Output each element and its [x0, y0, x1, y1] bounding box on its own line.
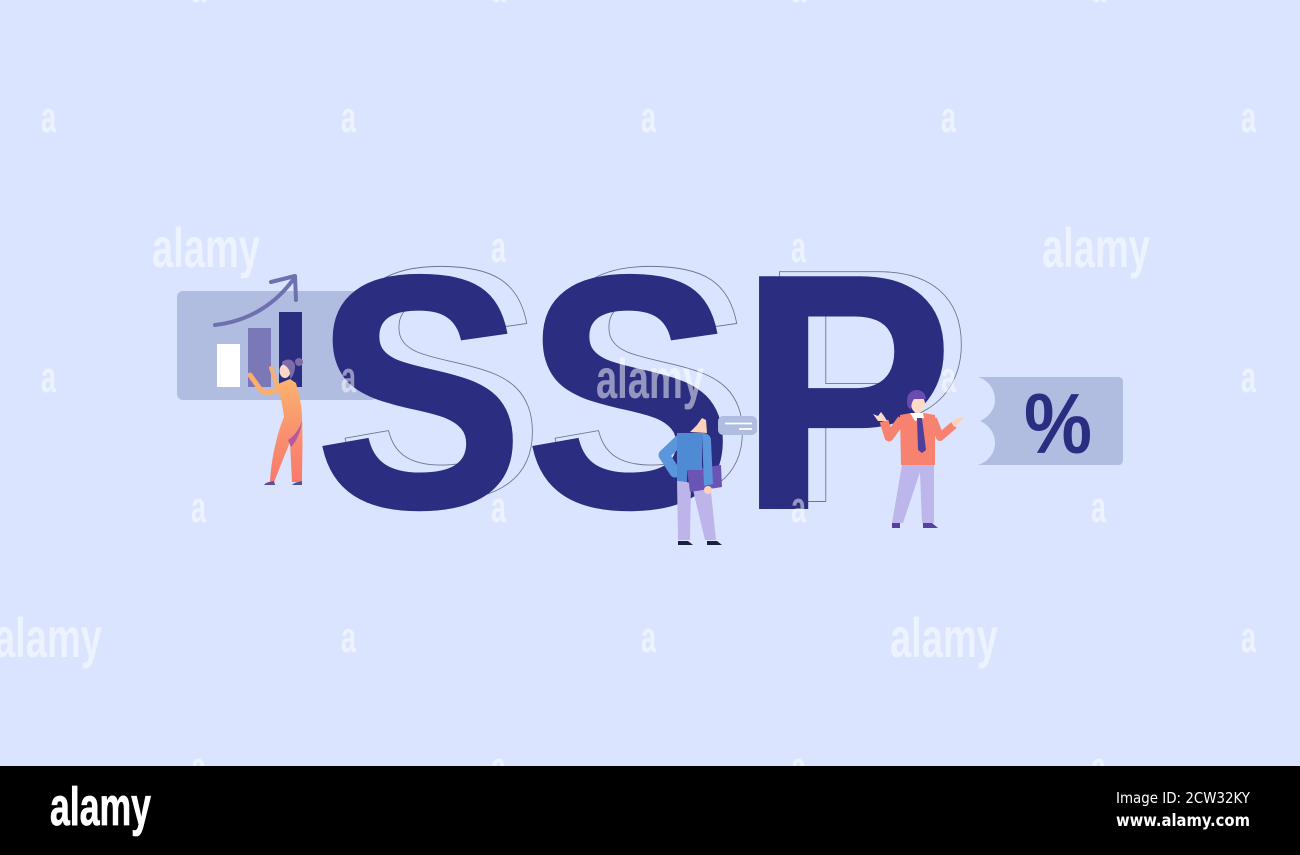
- icon: percent sign: %: [1024, 377, 1092, 472]
- footer bar: [0, 766, 1300, 855]
- woman: hair bun: [295, 358, 303, 366]
- watermarks: small repeated a marks: a: [641, 93, 656, 142]
- title: SSP: S: [525, 207, 734, 577]
- title: SSP: [315, 206, 953, 579]
- watermarks: small repeated a marks: a: [41, 93, 56, 142]
- figure: man with folder: [664, 416, 757, 545]
- man: trousers: [892, 465, 934, 523]
- watermarks: small repeated a marks: a: [791, 223, 806, 272]
- watermarks: alamy wordmarks: alamy: [1042, 216, 1150, 279]
- watermarks: small repeated a marks: a: [341, 353, 356, 402]
- figure: man in tie: [873, 390, 965, 528]
- panel: percent card: [978, 377, 1123, 465]
- man: collar: [910, 413, 924, 421]
- watermarks: alamy wordmarks: alamy: [596, 347, 704, 410]
- watermarks: alamy wordmarks: alamy: [152, 216, 260, 279]
- figure: woman pointing at chart: [250, 358, 303, 485]
- watermarks: alamy wordmarks: [0, 216, 1150, 669]
- footer image id: Image ID: 2CW32KY: [1116, 789, 1251, 807]
- man: right arm: [933, 419, 954, 437]
- man: shoes: [678, 541, 722, 545]
- watermarks: small repeated a marks: a: [641, 613, 656, 662]
- woman: raised arm: [271, 368, 277, 385]
- watermarks: small repeated a marks: a: [1091, 483, 1106, 532]
- woman: hip shadow: [288, 421, 302, 447]
- man: hair: [907, 390, 926, 410]
- man: shirt: [900, 413, 935, 465]
- man: forearm: [702, 433, 713, 486]
- man: shoes: [892, 523, 938, 528]
- footer logo: alamy: alamy: [50, 777, 151, 837]
- outline lettering: SSP offset: [336, 198, 972, 573]
- watermarks: small repeated a marks: a: [1091, 743, 1106, 792]
- woman: shoes: [264, 481, 302, 485]
- outline lettering: SSP offset: S: [546, 198, 755, 568]
- title: SSP: P: [739, 206, 953, 579]
- man: face: [911, 395, 925, 413]
- man: left arm: [884, 419, 902, 437]
- watermarks: small repeated a marks: a: [491, 483, 506, 532]
- watermarks: small repeated a marks: a: [1241, 93, 1256, 142]
- watermarks: small repeated a marks: a: [791, 483, 806, 532]
- woman: head: [280, 364, 290, 378]
- title: SSP: S: [315, 207, 524, 577]
- bar: navy: [279, 312, 302, 387]
- watermarks: small repeated a marks: a: [491, 743, 506, 792]
- woman: arm to chart: [250, 375, 280, 393]
- man: right hand: [951, 417, 965, 427]
- watermarks: alamy wordmarks: alamy: [890, 606, 998, 669]
- watermarks: small repeated a marks: a: [491, 223, 506, 272]
- outline lettering: SSP offset: P: [758, 200, 972, 573]
- man: hand: [704, 486, 712, 494]
- watermarks: small repeated a marks: a: [791, 743, 806, 792]
- watermarks: small repeated a marks: a: [1241, 353, 1256, 402]
- man: tie: [917, 418, 926, 453]
- watermarks: small repeated a marks: a: [1241, 613, 1256, 662]
- bar chart: [217, 312, 302, 387]
- man: left hand: [873, 412, 887, 421]
- bar: white: [217, 344, 240, 387]
- watermarks: small repeated a marks: a: [941, 93, 956, 142]
- bar: purple: [248, 328, 271, 387]
- watermarks: small repeated a marks: a: [191, 483, 206, 532]
- watermarks: small repeated a marks: a: [41, 353, 56, 402]
- watermarks: small repeated a marks: a: [341, 613, 356, 662]
- watermarks: small repeated a marks: a: [941, 353, 956, 402]
- man: legs: [677, 480, 716, 540]
- man: neck: [690, 418, 707, 433]
- speech bubble: [718, 416, 757, 435]
- woman: body and legs: [270, 379, 302, 482]
- footer url: www.alamy.com: [1116, 811, 1250, 831]
- watermarks: small repeated a marks: a: [341, 93, 356, 142]
- watermarks: small repeated a marks: a: [191, 743, 206, 792]
- panel: bar chart card: [177, 291, 377, 400]
- man: raised arm: [664, 439, 681, 472]
- woman: hair: [282, 360, 295, 379]
- arrow: growth trend: [215, 276, 296, 325]
- outline lettering: SSP offset: S: [336, 198, 545, 568]
- man: sweater: [677, 433, 702, 482]
- man: folder: [687, 465, 722, 492]
